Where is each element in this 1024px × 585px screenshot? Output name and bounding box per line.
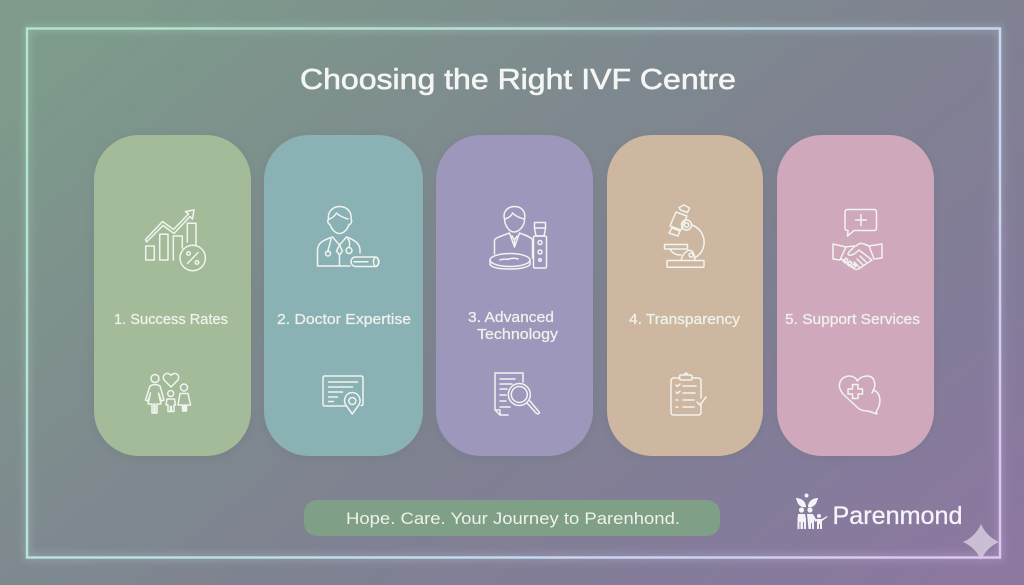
label: advanced technology: Technology	[477, 327, 559, 343]
tagline pill: Hope. Care. Your Journey to Parenhond.	[346, 509, 680, 528]
panel: doctor expertise	[264, 135, 423, 458]
icon: growth chart with percent	[146, 210, 205, 271]
panel: transparency	[607, 135, 763, 458]
icon: doctor with diploma	[318, 206, 379, 266]
icon: heart with plus and chat bubble	[839, 376, 880, 414]
panel: advanced technology	[436, 135, 593, 458]
label: advanced technology: 3. Advanced	[468, 310, 554, 326]
tagline pill	[304, 500, 720, 536]
icon: scientist with petri dish and flask	[490, 206, 546, 269]
icon: family with heart	[146, 373, 190, 413]
icon: document with magnifier	[495, 373, 540, 415]
wordmark: Parenmond	[832, 502, 962, 530]
icon: microscope	[664, 205, 704, 267]
icon: family with leaves	[796, 494, 828, 529]
label: support services: 5. Support Services	[785, 312, 920, 328]
panel: success rates	[94, 135, 251, 458]
icon: clipboard checklist	[671, 373, 706, 415]
title: Choosing the Right IVF Centre	[300, 64, 736, 96]
sparkle	[963, 524, 999, 560]
label: success rates: 1. Success Rates	[114, 312, 228, 328]
logo: Parenmond	[796, 494, 962, 530]
label: transparency: 4. Transparency	[629, 312, 741, 328]
panel: support services	[777, 135, 934, 458]
icon: speech bubble and handshake	[833, 210, 882, 269]
icon: certificate with badge	[323, 376, 363, 414]
label: advanced technology	[468, 310, 559, 343]
label: doctor expertise: 2. Doctor Expertise	[277, 312, 411, 328]
